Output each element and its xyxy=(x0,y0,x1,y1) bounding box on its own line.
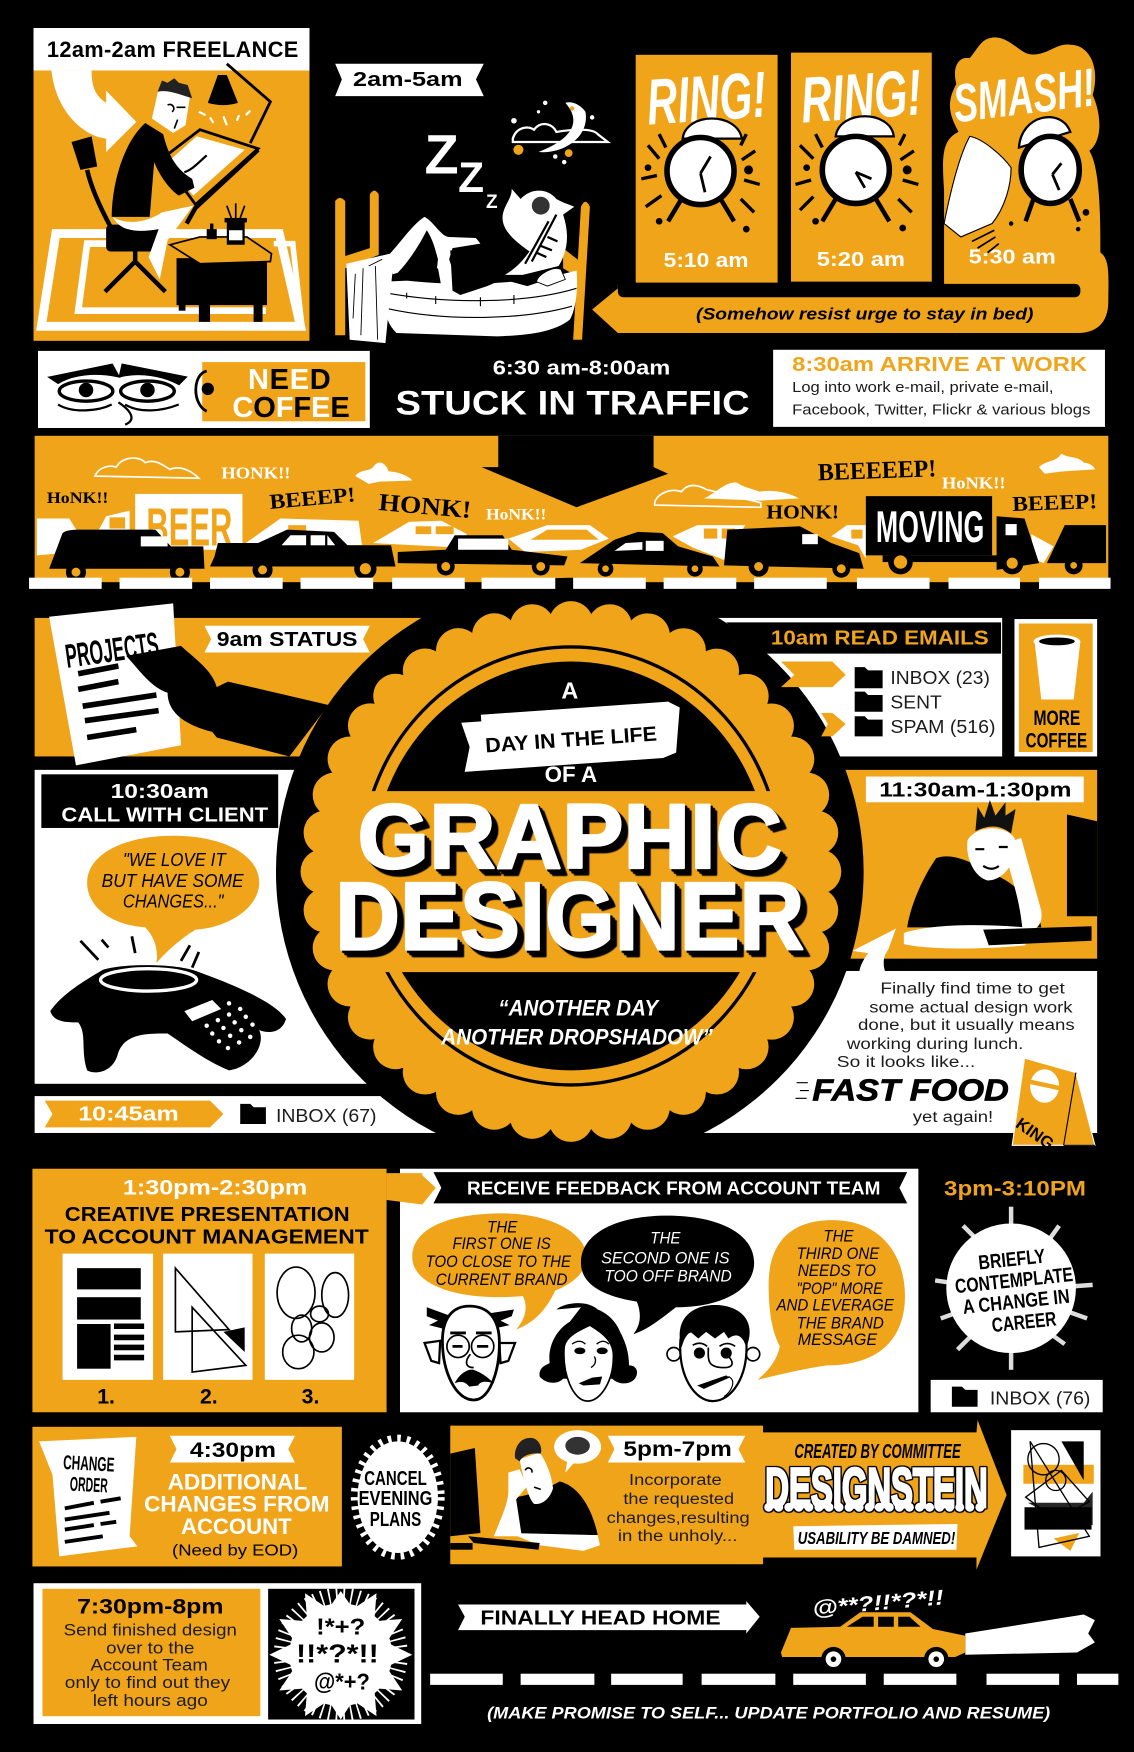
speech bubble 3 xyxy=(757,1220,905,1380)
note text: Finally find time to get xyxy=(880,980,1066,997)
ribbon: 9am status: 9am STATUS xyxy=(217,629,358,651)
burst with curse symbols: @*+? xyxy=(314,1668,370,1694)
heading text: CREATIVE PRESENTATION xyxy=(65,1203,350,1226)
label: usability be damned xyxy=(793,1524,957,1550)
slogan: another day another dropshadow: “ANOTHER DAY xyxy=(498,996,660,1021)
title: designstein: DESIGNSTEIN xyxy=(765,1456,988,1519)
orange detail on white vehicles xyxy=(109,517,863,540)
panel: ring 5:20 am xyxy=(791,53,932,282)
heading: stuck in traffic: 6:30 am-8:00am xyxy=(493,357,670,379)
heading: stuck in traffic xyxy=(396,357,750,423)
speech bubble 2: THE xyxy=(650,1230,681,1248)
burst: briefly contemplate a change in career: CONTEMPLATE xyxy=(954,1264,1074,1298)
text: fast food: FAST FOOD xyxy=(812,1075,1009,1108)
10:45am row contents xyxy=(45,1101,377,1127)
speech bubble xyxy=(87,836,259,963)
road dashes xyxy=(29,578,1111,589)
designer figure xyxy=(72,78,194,292)
sign text: beer: BEER xyxy=(146,497,232,557)
label: 11:30am-1:30pm: 11:30am-1:30pm xyxy=(879,780,1071,802)
speech bubble 3: THE xyxy=(823,1227,854,1245)
ribbon: day in the life xyxy=(461,701,683,772)
caption: make promise to self: (MAKE PROMISE TO SELF... UPDATE PORTFOLIO AND RESUME) xyxy=(487,1703,1051,1722)
icon: hand and sleeve xyxy=(126,646,328,756)
road dashes home xyxy=(430,1674,1118,1685)
heading box: 10:30am xyxy=(111,781,209,803)
speech bubble 2: TOO OFF BRAND xyxy=(604,1268,732,1286)
panel: 8:30am arrive at work: 8:30am ARRIVE AT WORK xyxy=(792,354,1088,376)
email folder labels: SENT xyxy=(890,691,942,712)
sheet 3: circles layout xyxy=(265,1254,354,1380)
burst: cancel evening plans: EVENING xyxy=(359,1488,432,1510)
icon: king fast food bag: KING xyxy=(1012,1114,1057,1154)
horn sound effects xyxy=(47,455,1098,524)
ribbon: 4:30pm: 4:30pm xyxy=(190,1439,276,1462)
sheet numbers: 3. xyxy=(302,1385,319,1408)
body text: Send finished design xyxy=(64,1622,237,1640)
burst: briefly contemplate a change in career: A CHANGE IN xyxy=(962,1286,1071,1319)
ribbon: day in the life: DAY IN THE LIFE xyxy=(484,722,658,757)
panel: more coffee xyxy=(1014,619,1097,756)
speech bubble: CHANGES..." xyxy=(123,890,225,911)
ribbon: 5pm-7pm xyxy=(608,1436,745,1463)
ribbon: 5pm-7pm: 5pm-7pm xyxy=(623,1438,732,1461)
horn sound effects: HONK!! xyxy=(221,463,290,482)
text: need by eod: (Need by EOD) xyxy=(172,1542,298,1559)
text: additional changes from account xyxy=(144,1469,330,1539)
speech bubble 3: MESSAGE xyxy=(798,1331,877,1349)
heading box xyxy=(41,774,278,828)
icon: projects paper: PROJECTS xyxy=(63,626,161,676)
burst: briefly contemplate a change in career: BRIEFLY xyxy=(977,1246,1047,1274)
title: graphic designer xyxy=(335,786,804,971)
face: young man xyxy=(667,1305,760,1401)
text: need coffee: COFFEE xyxy=(232,392,350,424)
snoring Zs: Z xyxy=(486,192,498,213)
icon: yellow taxi with headlight beam xyxy=(781,1612,1095,1671)
note text: some actual design work xyxy=(869,999,1073,1016)
panel: 5pm-7pm designstein arrow xyxy=(450,1420,1007,1570)
time heading: 1:30pm-2:30pm xyxy=(123,1176,307,1199)
icon: moon, stars and cloud xyxy=(511,101,608,164)
sheet 1: grid layout xyxy=(63,1254,153,1380)
10:30am call with client contents xyxy=(41,774,286,1072)
icon: alarm clock xyxy=(795,116,918,231)
text: A: A xyxy=(561,677,578,703)
text: incorporate the requested changes xyxy=(607,1472,750,1545)
speech bubble 3: "POP" MORE xyxy=(797,1280,883,1298)
panel: 1:30pm creative presentation: TO ACCOUNT MANAGEMENT xyxy=(45,1226,369,1249)
sheet numbers: 1. xyxy=(97,1385,115,1408)
sheet: designstein final result xyxy=(1011,1430,1100,1556)
panel: traffic jam scene xyxy=(35,436,1108,582)
body text: Account Team xyxy=(90,1656,208,1674)
panel: 1:30pm creative presentation xyxy=(32,1169,387,1412)
car windows and hubs xyxy=(72,524,1077,577)
heading: 12am-2am freelance: 12am-2am FREELANCE xyxy=(47,37,298,62)
burst with curse symbols: !*+? xyxy=(316,1614,365,1640)
slogan: another day another dropshadow xyxy=(440,996,714,1050)
panel: 9am status background xyxy=(35,618,437,756)
folder icons xyxy=(855,667,883,736)
icon: coffee cup xyxy=(1033,635,1080,699)
illustration: tired designer xyxy=(468,1438,600,1551)
icon: change order paper: ORDER xyxy=(69,1474,109,1498)
title: graphic designer: DESIGNER xyxy=(335,864,804,971)
sound effect: ring: RING! xyxy=(644,57,769,139)
speech bubble 1: THE xyxy=(487,1218,517,1236)
burst: briefly contemplate a change in career xyxy=(935,1207,1093,1370)
text: of a: OF A xyxy=(545,762,597,787)
panel: 11:30am background xyxy=(804,770,1097,959)
orange arrows xyxy=(781,661,846,736)
rug xyxy=(41,234,302,326)
speech bubble 3: NEEDS TO xyxy=(798,1262,876,1280)
email folder labels: INBOX (23) xyxy=(890,667,990,688)
ribbon: 10:45am xyxy=(45,1101,223,1127)
arrow banner: finally head home: FINALLY HEAD HOME xyxy=(480,1607,721,1630)
panel: inbox 76 xyxy=(931,1380,1103,1412)
speech bubble 3: THE BRAND xyxy=(797,1314,884,1332)
curse words above taxi: @**?!!*?*!! xyxy=(811,1586,945,1621)
center badge: a day in the life of a graphic designer xyxy=(276,578,864,1165)
panel: 8:30am arrive at work: Facebook, Twitter, Flickr & various blogs xyxy=(792,402,1090,419)
panel: 4:30pm additional changes xyxy=(32,1427,342,1566)
text: yet again: yet again! xyxy=(913,1109,993,1126)
speech bubble 1: TOO CLOSE TO THE xyxy=(426,1253,571,1271)
heading: 3pm-3:10pm: 3pm-3:10PM xyxy=(944,1178,1086,1201)
banner: 2am-5am xyxy=(335,64,484,96)
clouds xyxy=(95,454,1095,507)
9am status contents xyxy=(49,603,370,765)
email folder labels xyxy=(890,667,995,737)
white vehicles behind xyxy=(37,494,1054,563)
text: incorporate the requested changes: changes,resulting xyxy=(607,1510,750,1527)
heading: stuck in traffic: STUCK IN TRAFFIC xyxy=(396,385,750,423)
folder icon xyxy=(240,1104,266,1124)
text: need coffee: NEED xyxy=(248,364,331,396)
horn sound effects: HoNK!! xyxy=(942,473,1006,492)
horn sound effects: BEEEEEP! xyxy=(817,455,937,486)
ribbon: 9am status xyxy=(204,626,370,653)
panel: more coffee: COFFEE xyxy=(1026,730,1087,753)
label: 11:30am-1:30pm xyxy=(866,777,1084,802)
11:30am contents xyxy=(866,777,1097,948)
panel: ring 5:10 am xyxy=(636,55,778,283)
note text xyxy=(837,980,1075,1071)
burst: briefly contemplate a change in career: CAREER xyxy=(991,1308,1058,1337)
snoring Zs: Z xyxy=(458,154,484,201)
panel: 10:45am background xyxy=(35,1096,437,1133)
time: 5:20 am: 5:20 am xyxy=(817,249,905,271)
panel: 8:30am arrive at work xyxy=(773,350,1105,427)
icon: big down arrow xyxy=(482,436,668,507)
snoring Zs: Z xyxy=(425,122,459,185)
sign text: moving: MOVING xyxy=(876,503,984,552)
icon: desk lamp xyxy=(199,64,270,143)
body text: left hours ago xyxy=(93,1692,208,1710)
horn sound effects: BEEEP! xyxy=(1012,489,1098,516)
icon: change order paper xyxy=(39,1437,137,1556)
text: incorporate the requested changes: in the unholy... xyxy=(618,1528,737,1545)
face: woman xyxy=(540,1303,637,1401)
burst: cancel evening plans xyxy=(356,1440,439,1554)
text: incorporate the requested changes: the requested xyxy=(623,1491,734,1508)
label: usability be damned: USABILITY BE DAMNED! xyxy=(798,1528,955,1548)
arrow connector xyxy=(387,1173,436,1204)
note text: done, but it usually means xyxy=(858,1017,1075,1034)
body text xyxy=(64,1622,237,1710)
lunch note contents xyxy=(795,980,1095,1154)
heading box: CALL WITH CLIENT xyxy=(61,804,269,826)
ribbon: 10:45am: 10:45am xyxy=(78,1104,179,1126)
ribbon heading: RECEIVE FEEDBACK FROM ACCOUNT TEAM xyxy=(467,1177,880,1198)
body text: over to the xyxy=(106,1640,194,1658)
ribbon heading xyxy=(433,1172,907,1203)
note text: working during lunch. xyxy=(846,1036,1023,1053)
icon: projects paper xyxy=(49,603,181,765)
sheet 2: triangles layout xyxy=(163,1254,252,1380)
sound effect: ring: RING! xyxy=(798,55,924,137)
body text: only to find out they xyxy=(65,1674,231,1692)
heading: 10am read emails: 10am READ EMAILS xyxy=(771,628,989,650)
horn sound effects: BEEEP! xyxy=(268,482,356,514)
text: created by committee: CREATED BY COMMITTEE xyxy=(794,1441,961,1463)
slogan: another day another dropshadow: ANOTHER DROPSHADOW” xyxy=(440,1025,714,1050)
icon: smashed clock and hand xyxy=(944,117,1089,253)
icon: change order paper: CHANGE xyxy=(63,1452,115,1477)
panel: 7:30pm send finished design xyxy=(34,1583,421,1724)
note text: So it looks like... xyxy=(837,1054,975,1071)
panel: receive feedback from account team xyxy=(387,1169,918,1412)
banner: 2am-5am: 2am-5am xyxy=(353,69,463,91)
panel: inbox 76: INBOX (76) xyxy=(990,1387,1090,1408)
text: additional changes from account: ACCOUNT xyxy=(181,1514,292,1539)
horn sound effects: HoNK!! xyxy=(486,507,546,524)
side table with supplies xyxy=(170,203,271,322)
caption: resist urge: (Somehow resist urge to stay in bed) xyxy=(696,306,1033,324)
icon: curved white arrow xyxy=(51,70,136,152)
horn sound effects: HoNK!! xyxy=(47,490,108,507)
snoring Zs xyxy=(425,122,498,213)
speech bubble 3: THIRD ONE xyxy=(797,1245,879,1263)
time: 5:10 am: 5:10 am xyxy=(664,250,749,272)
arrow banner: finally head home xyxy=(458,1601,760,1633)
panel: smash 5:30 am with arrow back to bed xyxy=(592,37,1109,333)
ribbon: 4:30pm xyxy=(170,1436,295,1463)
thought bubble xyxy=(554,1430,601,1473)
icon: conference phone xyxy=(50,965,286,1072)
icon: white up arrow xyxy=(852,929,896,974)
speech bubble 1: CURRENT BRAND xyxy=(436,1271,568,1289)
speech bubble 2: SECOND ONE IS xyxy=(601,1250,730,1268)
drawing board xyxy=(162,130,258,224)
panel: lunch note background xyxy=(704,971,1097,1133)
illustration: designer at desk xyxy=(904,800,1092,948)
icon: king fast food bag xyxy=(1012,1058,1095,1154)
sheet numbers: 2. xyxy=(200,1385,218,1408)
speech bubble 2 xyxy=(581,1216,754,1334)
burst: cancel evening plans: PLANS xyxy=(370,1509,421,1531)
burst: cancel evening plans: CANCEL xyxy=(364,1468,427,1490)
panel: more coffee: MORE xyxy=(1033,707,1080,730)
phone ring marks xyxy=(80,936,199,968)
illustration: sleeping designer in bed xyxy=(335,189,590,343)
icon: alarm clock xyxy=(641,119,760,232)
speech bubble: BUT HAVE SOME xyxy=(102,870,244,891)
time: 5:30 am: 5:30 am xyxy=(969,247,1056,269)
time heading: 7:30pm-8pm xyxy=(77,1595,223,1618)
speech bubble 1: FIRST ONE IS xyxy=(452,1235,551,1253)
speed lines xyxy=(795,1083,809,1098)
panel: 10:30am background xyxy=(35,770,370,1084)
title: graphic designer: GRAPHIC xyxy=(358,786,782,888)
horn sound effects: HONK! xyxy=(378,489,472,524)
horn sound effects: HONK! xyxy=(766,501,839,523)
sheet numbers xyxy=(97,1385,319,1408)
burst with curse symbols xyxy=(269,1591,412,1720)
scalloped seal xyxy=(323,624,819,1120)
text: incorporate the requested changes: Incorporate xyxy=(629,1472,722,1489)
10am read emails contents xyxy=(771,628,995,737)
icon: tired eyes xyxy=(51,365,212,425)
inbox count: INBOX (67) xyxy=(276,1105,377,1126)
burst with curse symbols: !!*?*!! xyxy=(296,1641,379,1669)
panel: 10am read emails background xyxy=(704,618,1002,756)
inner domes xyxy=(361,647,781,1085)
monitor xyxy=(450,1448,480,1550)
panel: 8:30am arrive at work: Log into work e-mail, private e-mail, xyxy=(792,379,1054,396)
monitor xyxy=(1067,815,1097,916)
black traffic cars xyxy=(49,496,1106,582)
speech bubble 1 xyxy=(412,1213,587,1330)
speech bubble: "WE LOVE IT xyxy=(123,849,227,870)
text: additional changes from account: CHANGES FROM xyxy=(144,1492,330,1517)
panel: 12am-2am freelance xyxy=(34,28,309,341)
panel: need coffee xyxy=(38,351,370,428)
email folder labels: SPAM (516) xyxy=(890,716,995,737)
face: man with glasses xyxy=(425,1306,515,1400)
text: need coffee xyxy=(232,364,350,424)
text: additional changes from account: ADDITIONAL xyxy=(168,1469,307,1494)
speech bubble 3: AND LEVERAGE xyxy=(776,1297,894,1315)
